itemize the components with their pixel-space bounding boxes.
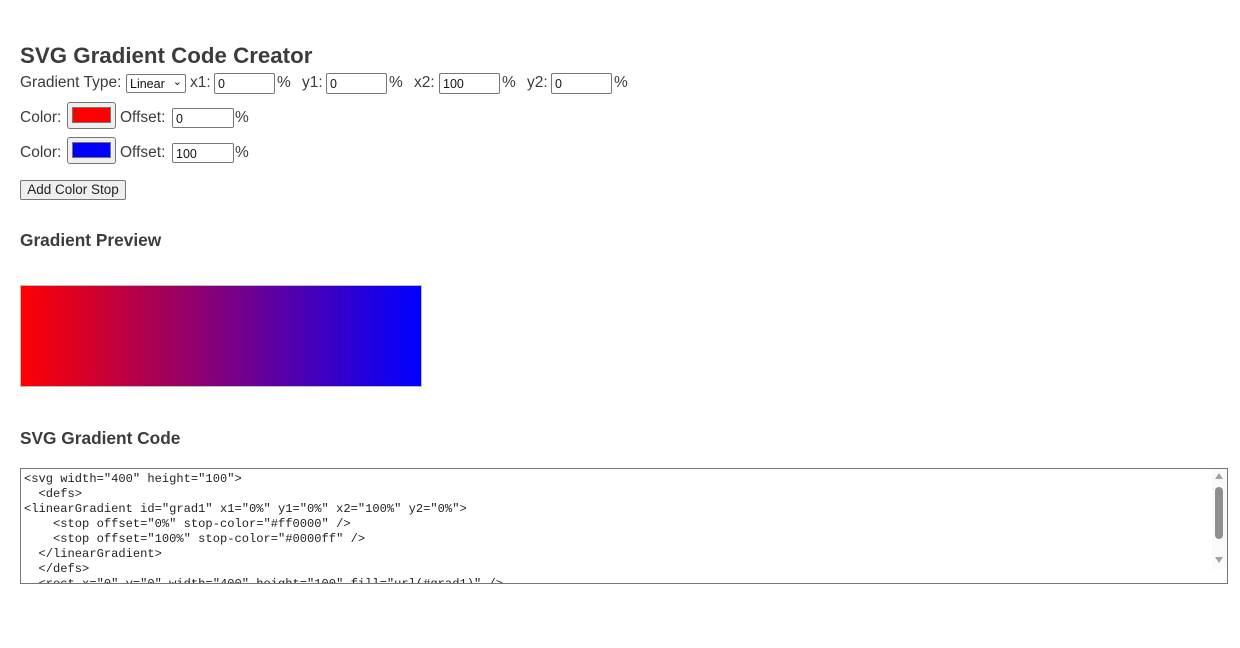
controls: gradient type row: Linear [130,77,165,91]
controls: gradient type row: % [389,74,403,91]
color stop 1: % [235,109,249,126]
code textarea [20,468,1228,584]
controls: gradient type row: x2: [414,74,435,91]
controls: gradient type row: 0 [218,77,225,91]
controls: gradient type row: 0 [555,77,562,91]
controls: gradient type row [20,73,628,94]
color stop 2 [20,137,249,164]
button: add color stop [20,180,126,200]
controls: gradient type row: x1: [190,74,211,91]
color stop 2: 100 [176,147,197,161]
controls: gradient type row: 100 [443,77,464,91]
color stop 2: Color: [20,144,61,161]
gradient preview box [20,285,422,387]
color stop 2: Offset: [120,144,165,161]
controls: gradient type row: y2: [527,74,548,91]
title: SVG Gradient Code Creator [20,43,312,68]
controls: gradient type row: y1: [302,74,323,91]
controls: gradient type row: % [277,74,291,91]
button: add color stop: Add Color Stop [27,182,119,197]
color stop 1 [20,102,249,129]
heading: svg gradient code: SVG Gradient Code [20,428,180,448]
controls: gradient type row: Gradient Type: [20,74,121,91]
color stop 1: Color: [20,109,61,126]
color stop 1: 0 [176,112,183,126]
controls: gradient type row: % [614,74,628,91]
heading: gradient preview: Gradient Preview [20,230,161,250]
scrollbar [1212,469,1227,569]
controls: gradient type row: ⌄ [173,76,182,88]
controls: gradient type row: % [502,74,516,91]
color stop 2: % [235,144,249,161]
color stop 1: Offset: [120,109,165,126]
controls: gradient type row: 0 [330,77,337,91]
